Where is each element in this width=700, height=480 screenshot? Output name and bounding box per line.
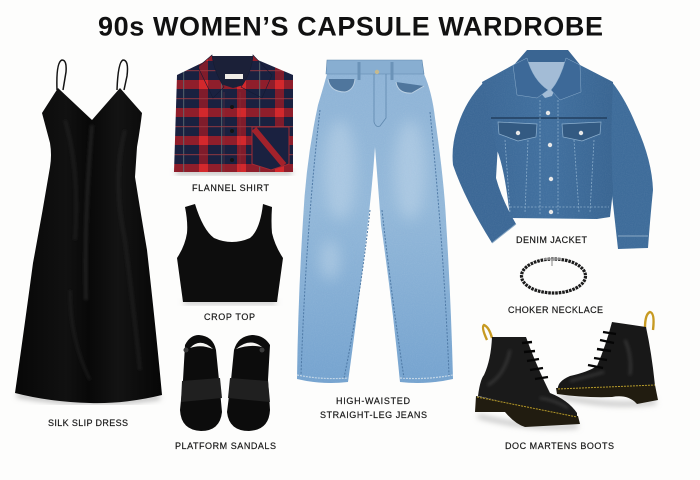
left boot gloss bbox=[488, 350, 568, 408]
jeans belt loops bbox=[359, 62, 392, 80]
item: denim jacket bbox=[453, 50, 653, 249]
right boot pull tab bbox=[645, 312, 654, 330]
label: flannel shirt: FLANNEL SHIRT bbox=[192, 183, 270, 193]
left boot upper bbox=[478, 337, 577, 418]
dress shadow bbox=[17, 395, 160, 402]
left sandal strap bbox=[181, 378, 222, 402]
label line 2: STRAIGHT-LEG JEANS bbox=[320, 410, 427, 420]
right boot bbox=[556, 312, 658, 404]
dress straps bbox=[57, 60, 127, 90]
jeans body bbox=[297, 60, 453, 383]
right boot gloss bbox=[570, 340, 630, 381]
right sleeve bbox=[600, 82, 653, 249]
shirt shadow bbox=[176, 170, 292, 174]
left boot sole bbox=[475, 396, 580, 427]
left sandal buckle bbox=[184, 348, 188, 352]
shirt collar left bbox=[198, 55, 224, 98]
shirt neck label bbox=[225, 74, 243, 79]
label: denim jacket: DENIM JACKET bbox=[516, 235, 588, 245]
jacket back collar bbox=[513, 50, 581, 66]
shirt body bbox=[174, 58, 293, 172]
label: silk slip dress: SILK SLIP DRESS bbox=[48, 418, 128, 428]
left sleeve bbox=[453, 82, 516, 243]
right sandal buckle bbox=[260, 348, 264, 352]
left sandal body bbox=[180, 335, 222, 431]
jeans waistband bbox=[326, 60, 424, 74]
jacket body bbox=[482, 65, 613, 219]
boot shadows bbox=[478, 396, 656, 427]
right boot welt stitch bbox=[558, 385, 655, 389]
item: high-waisted jeans bbox=[297, 60, 453, 383]
right sandal body bbox=[227, 335, 270, 431]
left boot pull tab bbox=[483, 325, 492, 340]
item: crop top bbox=[177, 204, 283, 304]
label: doc martens boots: DOC MARTENS BOOTS bbox=[505, 441, 614, 451]
shirt inner neck bbox=[208, 56, 262, 88]
left boot welt stitch bbox=[477, 397, 577, 417]
jacket cuffs bbox=[492, 224, 648, 243]
choker clasp bbox=[544, 259, 562, 266]
right boot upper bbox=[558, 322, 655, 391]
jacket left pocket bbox=[498, 122, 537, 141]
right boot laces bbox=[588, 332, 616, 368]
title: 90s WOMEN’S CAPSULE WARDROBE bbox=[98, 12, 603, 42]
right boot sole bbox=[556, 385, 658, 404]
crop top shadow bbox=[184, 300, 276, 304]
shirt pocket plaid bbox=[254, 129, 284, 165]
jacket seams bbox=[505, 100, 609, 215]
jeans button bbox=[375, 70, 379, 74]
dress body bbox=[15, 88, 162, 403]
crop top body bbox=[177, 204, 283, 302]
jacket yoke bbox=[491, 117, 607, 119]
right sandal bbox=[227, 335, 270, 431]
shirt placket bbox=[224, 92, 240, 172]
item: platform sandals bbox=[180, 335, 270, 431]
jacket lining bbox=[527, 62, 566, 98]
item: doc martens boots bbox=[475, 312, 658, 427]
label: choker necklace: CHOKER NECKLACE bbox=[508, 305, 603, 315]
left sandal bbox=[180, 335, 222, 431]
jacket buttons bbox=[516, 111, 583, 214]
label: jeans bbox=[320, 396, 427, 420]
choker band bbox=[522, 259, 586, 293]
item: silk slip dress bbox=[15, 60, 162, 403]
jacket collar left bbox=[513, 58, 548, 98]
right sandal heel gap bbox=[236, 342, 262, 349]
jacket collar right bbox=[551, 58, 581, 100]
jeans fading bbox=[320, 120, 426, 280]
label: platform sandals: PLATFORM SANDALS bbox=[175, 441, 276, 451]
shirt buttons bbox=[230, 105, 234, 162]
jacket right pocket bbox=[562, 122, 601, 141]
jeans pockets bbox=[328, 79, 424, 93]
left sandal heel gap bbox=[190, 343, 213, 349]
label line 1: HIGH-WAISTED bbox=[336, 396, 410, 406]
item: flannel shirt bbox=[174, 55, 293, 174]
left boot bbox=[475, 325, 580, 427]
shirt pocket bbox=[252, 127, 289, 170]
jeans texture bbox=[297, 60, 453, 383]
jeans seams bbox=[301, 110, 449, 378]
label: crop top: CROP TOP bbox=[204, 312, 255, 322]
item: choker necklace bbox=[522, 259, 586, 293]
dress sheen folds bbox=[65, 120, 140, 380]
right sandal strap bbox=[228, 378, 270, 402]
jeans hems bbox=[297, 375, 453, 379]
jacket texture bbox=[453, 65, 653, 249]
shirt collar right bbox=[241, 55, 272, 98]
left boot laces bbox=[522, 342, 548, 379]
jeans fly bbox=[374, 74, 386, 126]
